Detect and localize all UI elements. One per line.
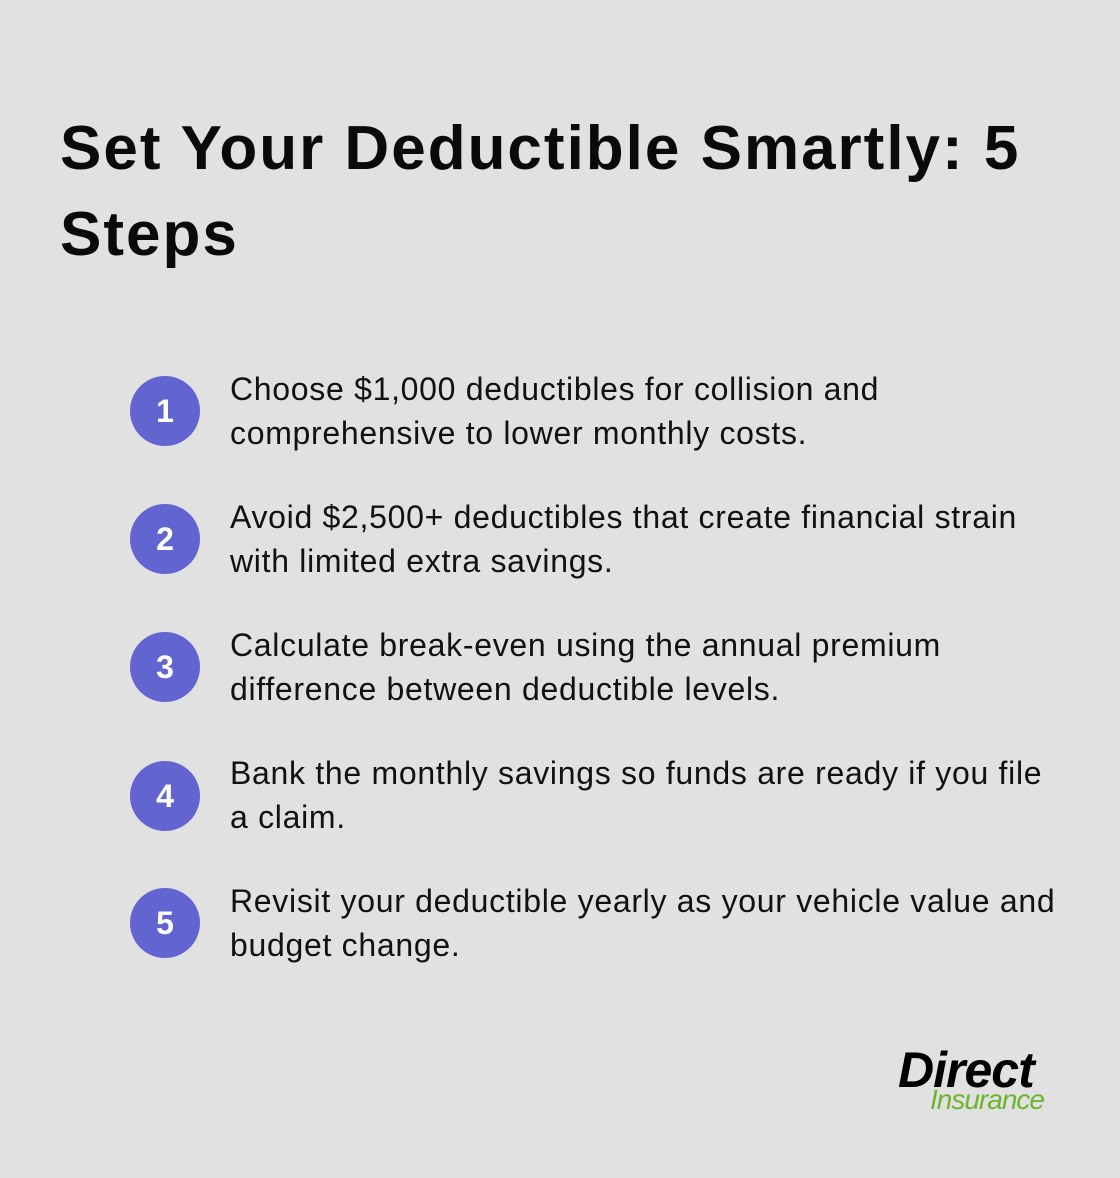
step 3: difference between deductible levels. xyxy=(230,671,780,707)
title: Set Your Deductible Smartly: 5 xyxy=(60,114,1020,183)
step 4: a claim. xyxy=(230,799,346,835)
step 5 xyxy=(130,883,1055,963)
step 1: comprehensive to lower monthly costs. xyxy=(230,415,807,451)
step 2: with limited extra savings. xyxy=(230,543,613,579)
step 1: 1 xyxy=(156,393,174,429)
step 2: 2 xyxy=(156,521,174,557)
step 1: Choose $1,000 deductibles for collision and xyxy=(230,371,879,407)
step 1 xyxy=(130,371,879,451)
step 4: 4 xyxy=(156,778,174,814)
step 2: Avoid $2,500+ deductibles that create financial strain xyxy=(230,499,1017,535)
step 4 xyxy=(130,755,1042,835)
step 2 xyxy=(130,499,1017,579)
step 3: 3 xyxy=(156,649,174,685)
step 5: budget change. xyxy=(230,927,460,963)
step 3: Calculate break-even using the annual premium xyxy=(230,627,941,663)
step 3 xyxy=(130,627,941,707)
step 4: Bank the monthly savings so funds are ready if you file xyxy=(230,755,1042,791)
logo: Insurance xyxy=(930,1084,1044,1115)
title xyxy=(60,114,1020,269)
step 5: Revisit your deductible yearly as your vehicle value and xyxy=(230,883,1055,919)
step 5: 5 xyxy=(156,905,174,941)
logo: Direct xyxy=(898,1042,1034,1098)
title: Steps xyxy=(60,200,239,269)
